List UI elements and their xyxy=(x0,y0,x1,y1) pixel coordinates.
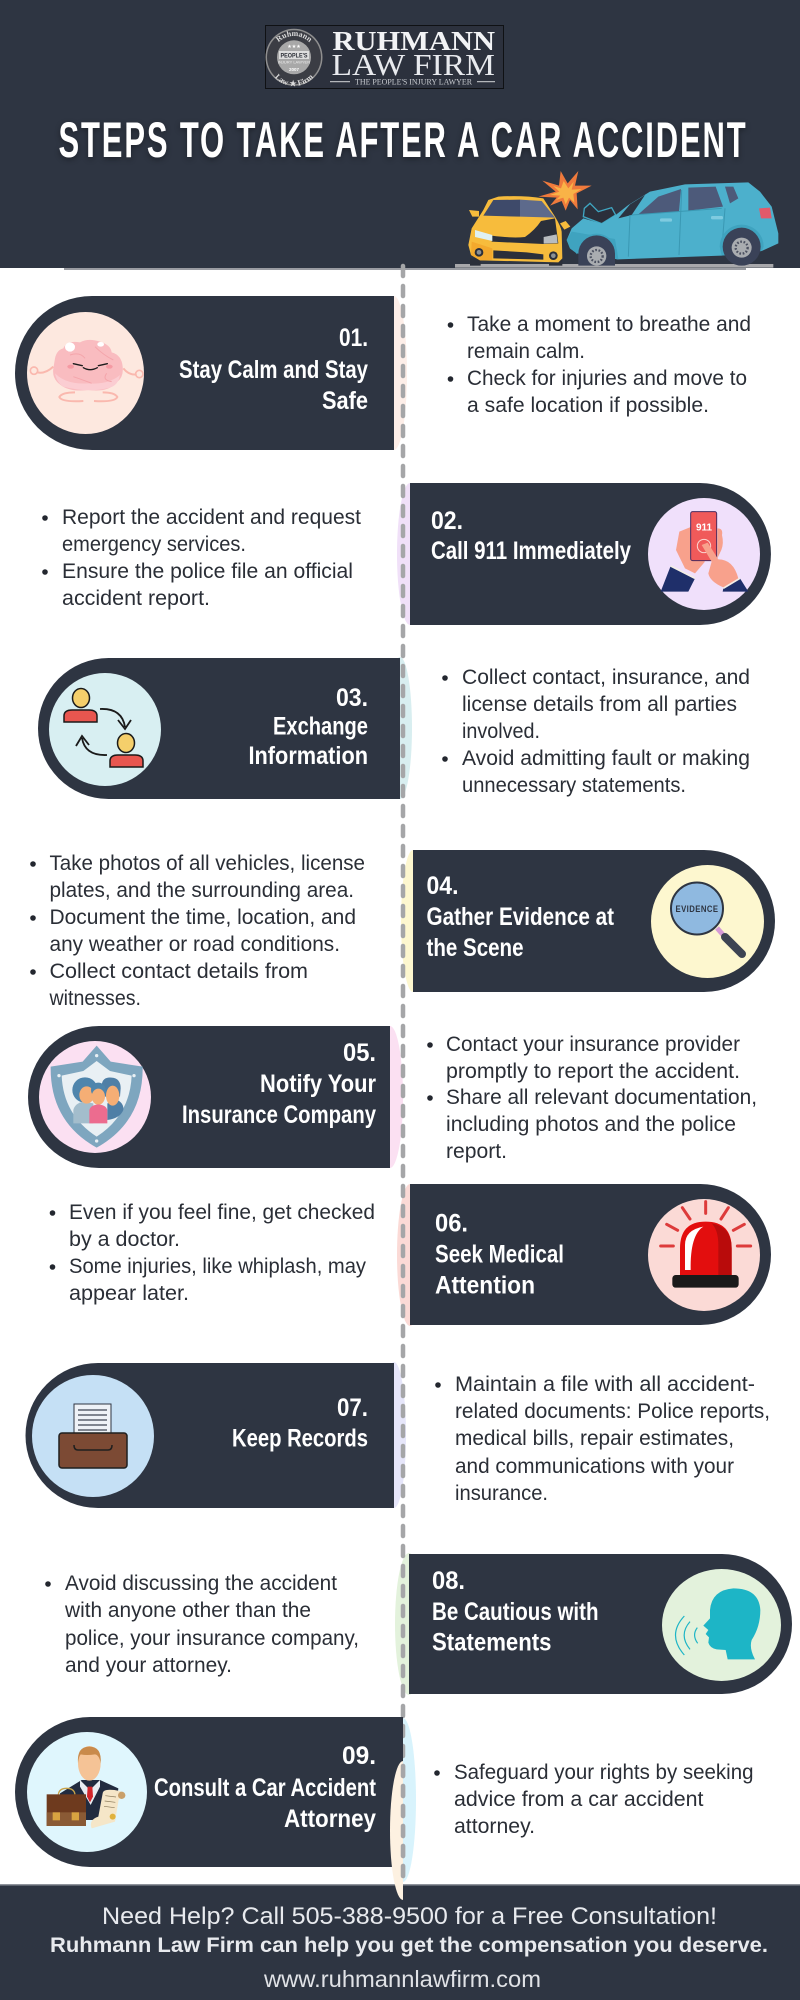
step 09 panel xyxy=(15,1717,403,1867)
step 06 text: Some injuries, like whiplash, may xyxy=(69,1255,366,1278)
step 04 text: witnesses. xyxy=(49,987,141,1010)
step 06 panel xyxy=(410,1184,771,1325)
step 08 heading: Statements xyxy=(432,1628,552,1656)
step 02 text: emergency services. xyxy=(62,533,246,556)
logo: RUHMANN xyxy=(332,26,496,56)
logo: ★★★ xyxy=(287,44,301,50)
footer tagline: Ruhmann Law Firm can help you get the compensation you deserve. xyxy=(50,1934,768,1957)
icon: emergency siren xyxy=(661,1202,751,1288)
footer call to action: Need Help? Call 505-388-9500 for a Free Consultation! xyxy=(102,1903,717,1930)
step 09 heading: Attorney xyxy=(284,1805,376,1833)
step 07 panel xyxy=(26,1363,394,1508)
step 07 text: Maintain a file with all accident- xyxy=(455,1373,755,1396)
step 05 panel xyxy=(28,1026,390,1168)
icon: phone 911: 911 xyxy=(696,523,712,534)
step 05 heading: Notify Your xyxy=(260,1070,376,1098)
step 05 text xyxy=(427,1033,757,1163)
step 08 heading xyxy=(432,1567,598,1656)
step 05 text: report. xyxy=(446,1140,507,1163)
step 04 text: Collect contact details from xyxy=(50,960,308,983)
icon: magnifier evidence: EVIDENCE xyxy=(676,904,718,914)
step 04 panel xyxy=(413,850,775,992)
step 06 text: appear later. xyxy=(69,1282,189,1305)
step 07 text: medical bills, repair estimates, xyxy=(455,1427,734,1450)
crash star xyxy=(538,171,592,211)
step 08 text: and your attorney. xyxy=(65,1654,232,1677)
step 06 text xyxy=(50,1201,375,1305)
step 08 text xyxy=(45,1572,359,1677)
step 03 text: license details from all parties xyxy=(462,693,737,716)
step 08 text: Avoid discussing the accident xyxy=(65,1572,337,1595)
step 06 heading: 06. xyxy=(435,1210,468,1238)
illustration: car collision xyxy=(455,171,778,268)
timeline segment over cream accent xyxy=(401,1766,405,1880)
step 08 heading: 08. xyxy=(432,1567,465,1595)
step 02 heading xyxy=(431,507,631,565)
step 08 text: with anyone other than the xyxy=(64,1599,311,1622)
step 09 heading xyxy=(154,1742,377,1833)
logo: Ruhmann xyxy=(275,31,312,42)
step 05 heading: Insurance Company xyxy=(182,1101,376,1129)
step 02 heading: 02. xyxy=(431,507,463,535)
logo xyxy=(265,25,504,89)
step 03 heading xyxy=(248,684,368,770)
step 05 heading: 05. xyxy=(343,1039,376,1067)
step 01 heading: Stay Calm and Stay xyxy=(179,356,368,384)
step 01 text: Take a moment to breathe and xyxy=(467,313,751,336)
step 09 text: advice from a car accident xyxy=(454,1788,704,1811)
step 03 text: unnecessary statements. xyxy=(462,774,686,797)
step 07 text: insurance. xyxy=(455,1482,548,1505)
icon: meditating brain xyxy=(30,340,143,401)
step 06 heading: Attention xyxy=(435,1272,535,1300)
footer website: www.ruhmannlawfirm.com xyxy=(263,1966,541,1992)
icon: exchange people xyxy=(64,688,143,767)
timeline dashed line xyxy=(401,266,405,1880)
logo: LAW FIRM xyxy=(332,47,495,82)
icon: speaking head xyxy=(675,1588,760,1659)
step 09 text: attorney. xyxy=(454,1815,535,1838)
step 06 text: Even if you feel fine, get checked xyxy=(69,1201,375,1224)
step 04 heading: Gather Evidence at xyxy=(426,903,615,931)
step 02 text: Report the accident and request xyxy=(62,506,361,529)
logo: THE PEOPLE'S INJURY LAWYER xyxy=(355,76,472,86)
step 03 text: Avoid admitting fault or making xyxy=(462,747,750,770)
step 04 text: Document the time, location, and xyxy=(50,906,356,929)
step 07 heading: 07. xyxy=(337,1394,368,1422)
step 04 text: any weather or road conditions. xyxy=(50,933,340,956)
step 03 text: Collect contact, insurance, and xyxy=(462,666,750,689)
step 02 panel xyxy=(410,483,771,625)
step 04 text: Take photos of all vehicles, license xyxy=(50,852,365,875)
step 03 heading: 03. xyxy=(336,684,368,712)
step 01 heading: 01. xyxy=(339,324,368,352)
icon: family shield xyxy=(51,1046,143,1148)
step 04 heading: the Scene xyxy=(426,934,524,962)
step 01 text: remain calm. xyxy=(467,340,585,363)
step 08 text: police, your insurance company, xyxy=(65,1627,359,1650)
step 01 heading xyxy=(179,324,368,415)
step 06 text: by a doctor. xyxy=(69,1228,180,1251)
logo: Law ★ Firm xyxy=(274,74,314,86)
icon: attorney xyxy=(47,1746,126,1828)
blue car xyxy=(567,182,778,266)
step 07 heading: Keep Records xyxy=(232,1424,368,1452)
step 02 text xyxy=(42,506,361,610)
step 03 text xyxy=(442,666,750,797)
step 08 panel xyxy=(409,1554,792,1694)
tinted ellipses behind timeline xyxy=(377,296,425,1882)
step 06 heading: Seek Medical xyxy=(435,1240,564,1268)
step 01 text: a safe location if possible. xyxy=(467,394,709,417)
step 09 heading: Consult a Car Accident xyxy=(154,1774,377,1802)
logo: PEOPLE'S xyxy=(280,52,308,60)
step 09 text xyxy=(434,1761,754,1838)
step 04 text: plates, and the surrounding area. xyxy=(50,879,354,902)
step 03 heading: Information xyxy=(248,742,368,770)
step 05 text: including photos and the police xyxy=(446,1113,736,1136)
step 01 heading: Safe xyxy=(322,387,368,415)
step 07 text: related documents: Police reports, xyxy=(455,1400,770,1423)
step 09 text: Safeguard your rights by seeking xyxy=(454,1761,754,1784)
icon: phone 911 xyxy=(661,512,748,592)
footer band xyxy=(0,1884,800,2000)
step 04 heading: 04. xyxy=(426,872,458,900)
logo: INJURY LAWYER xyxy=(278,60,310,64)
step 09 heading: 09. xyxy=(342,1742,376,1770)
step 02 text: accident report. xyxy=(62,587,210,610)
step 03 heading: Exchange xyxy=(273,712,368,740)
step 07 text: and communications with your xyxy=(455,1455,734,1478)
step 05 text: Share all relevant documentation, xyxy=(446,1086,757,1109)
header band xyxy=(0,0,800,270)
step 04 heading xyxy=(426,872,615,962)
step 02 heading: Call 911 Immediately xyxy=(431,537,631,565)
step 04 text xyxy=(30,852,365,1010)
step 05 heading xyxy=(182,1039,376,1129)
step 03 panel xyxy=(38,658,400,799)
step 05 text: promptly to report the accident. xyxy=(446,1060,740,1083)
step 07 heading xyxy=(232,1394,368,1452)
logo: 2007 xyxy=(289,67,300,72)
step 05 text: Contact your insurance provider xyxy=(446,1033,740,1056)
step 01 panel xyxy=(15,296,394,450)
icon: records drawer xyxy=(59,1404,127,1468)
step 02 text: Ensure the police file an official xyxy=(62,560,353,583)
step 06 heading xyxy=(435,1210,564,1300)
step 01 text: Check for injuries and move to xyxy=(467,367,747,390)
step 08 heading: Be Cautious with xyxy=(432,1598,598,1626)
yellow car xyxy=(468,196,570,266)
icon: magnifier evidence xyxy=(671,882,742,954)
step 03 text: involved. xyxy=(462,720,540,743)
step 07 text xyxy=(435,1373,770,1505)
step 01 text xyxy=(448,313,751,417)
cream ellipse accent over step 09 xyxy=(390,1761,403,1900)
